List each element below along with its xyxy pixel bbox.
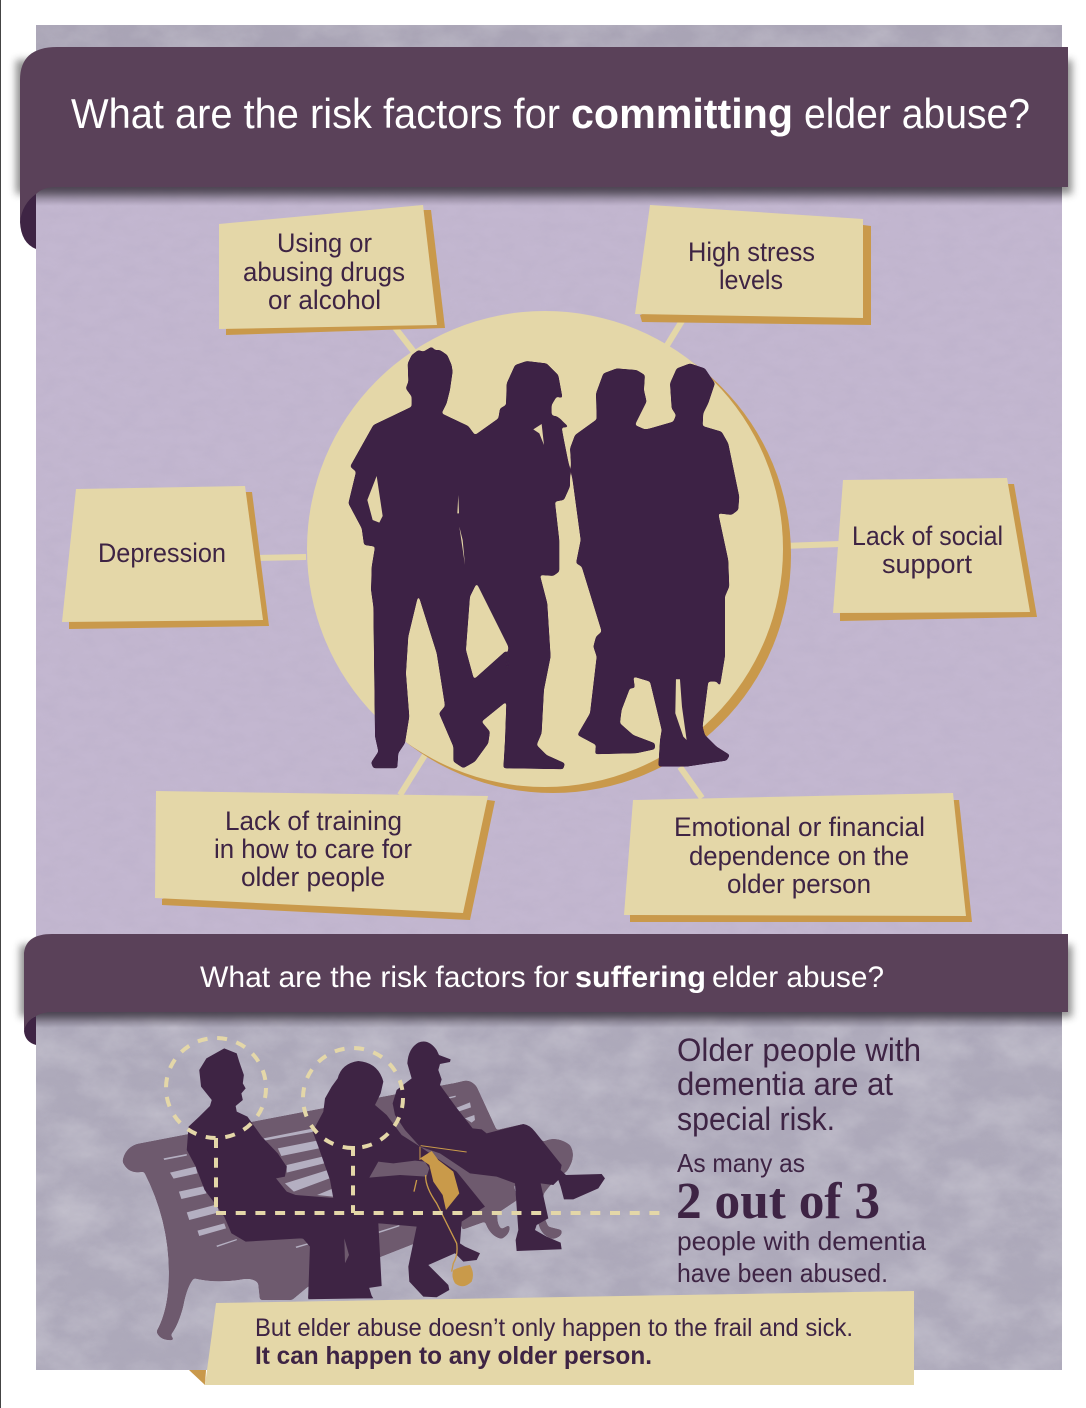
text: dementia special risk: special risk. [677,1101,835,1137]
box: emotional or financial dependence: dependence on the [689,841,909,871]
box: high stress: levels [719,265,783,295]
statistic: 2 out of 3 [676,1148,927,1288]
heading: suffering: What are the risk factors for [200,961,569,994]
box: depression: Depression [98,538,226,568]
bench slats [164,1096,475,1248]
box: drugs or alcohol: or alcohol [268,285,381,315]
knitting and yarn [414,1146,473,1286]
box: drugs or alcohol [219,205,445,335]
statistic: 2 out of 3: As many as [677,1148,805,1178]
box: high stress: High stress [688,237,815,267]
page edge line [0,0,1,1408]
callout: any older person: It can happen to any older person. [255,1342,652,1370]
box: lack of training: in how to care for [214,834,412,864]
box: lack of training: Lack of training [225,806,402,836]
heading: committing: elder abuse? [804,90,1030,137]
banner: suffering elder abuse [20,934,1072,1045]
man with crossed arms [187,1048,380,1298]
heading: suffering: suffering [575,961,706,994]
heading: committing [71,90,1030,137]
statistic: 2 out of 3: 2 out of 3 [676,1173,880,1230]
box: lack of training [155,791,495,920]
heading: committing: What are the risk factors for [71,90,560,137]
dashed brain and line markers [166,1038,665,1213]
banner: committing elder abuse [16,47,1072,249]
box: high stress [635,205,871,325]
illustration: three people on a bench [122,1041,605,1340]
silhouettes: four standing people [348,347,739,769]
box: lack of social support: Lack of social [852,521,1003,551]
text: dementia special risk [677,1032,921,1137]
heading: committing: committing [571,90,793,137]
man with cap [393,1041,605,1251]
connector lines [255,316,840,798]
box: drugs or alcohol: abusing drugs [243,257,405,287]
heading: suffering: elder abuse? [712,961,884,994]
box: depression [62,486,269,629]
statistic: 2 out of 3: people with dementia [677,1226,927,1256]
box: emotional or financial dependence: older person [727,869,871,899]
box: lack of training: older people [241,862,385,892]
box: lack of social support: support [882,549,972,579]
heading: suffering [200,961,884,994]
text: dementia special risk: dementia are at [677,1066,893,1102]
woman's arm [369,1161,429,1178]
box: emotional or financial dependence: Emotional or financial [674,812,925,842]
text: dementia special risk: Older people with [677,1032,921,1068]
box: emotional or financial dependence [624,793,972,922]
woman knitting [290,1061,485,1299]
statistic: 2 out of 3: have been abused. [677,1258,888,1288]
callout: any older person: But elder abuse doesn’t only happen to the frail and sick. [255,1314,853,1342]
box: lack of social support [833,478,1037,621]
box: drugs or alcohol: Using or [277,228,372,258]
central circle [307,311,791,793]
bench [122,1081,573,1340]
callout: any older person [189,1291,914,1385]
